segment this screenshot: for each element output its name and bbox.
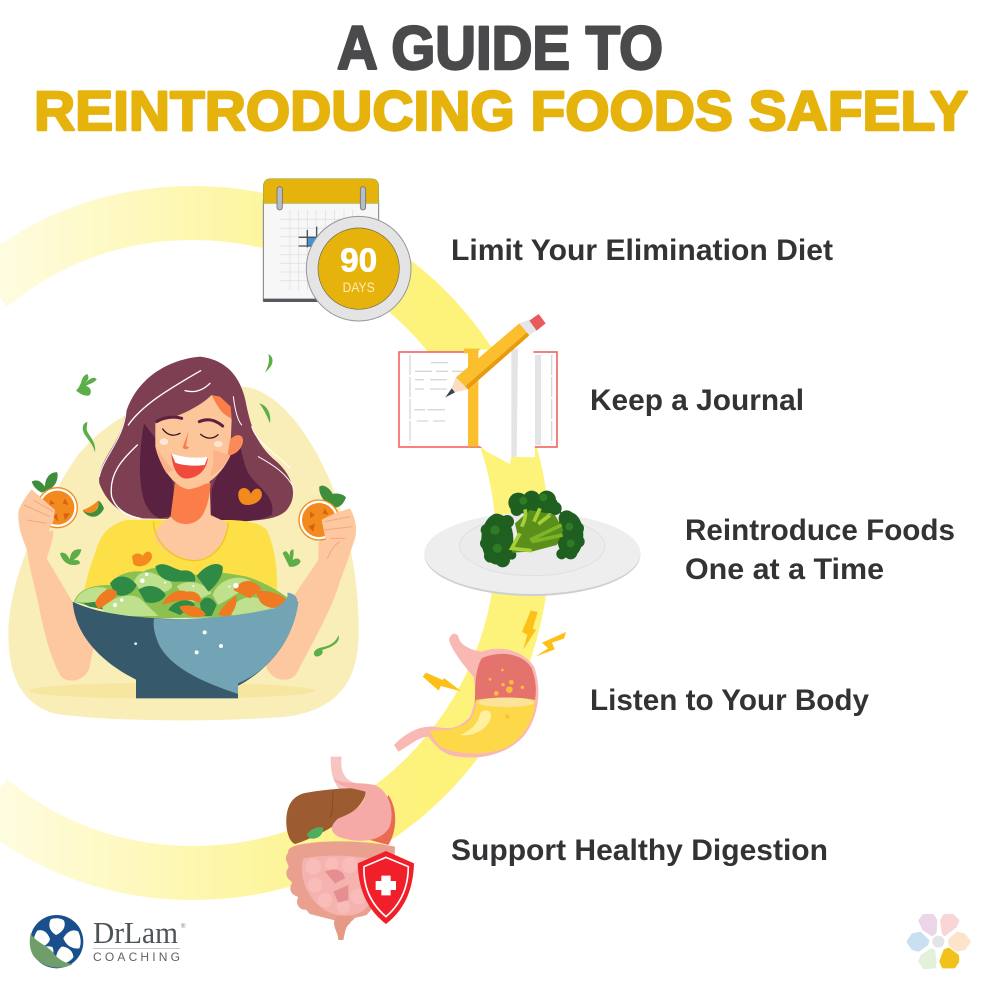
salad [74,564,293,618]
rectum [334,915,352,940]
forehead shadow [212,395,232,418]
bowl sparkles [134,630,223,654]
icon: flower mark [908,916,969,968]
bowl light side [154,602,298,694]
plate [424,513,640,596]
badge: 90 [340,242,377,279]
hair highlights [99,371,294,518]
esophagus [331,757,363,793]
label: reintroduce foods: Reintroduce Foods [685,514,955,547]
shirt [83,520,277,597]
acid highlight [460,710,491,735]
logo mark [30,915,83,968]
mouth [171,453,208,479]
stomach upper [475,654,536,702]
calendar page [263,200,379,301]
calendar header [263,179,379,203]
right orange [299,486,346,540]
calendar rings [277,187,366,210]
pencil [445,314,546,397]
neck [154,477,228,561]
bowl dark side [73,602,298,694]
hair back [99,357,293,521]
page lines [410,355,552,444]
ear [227,435,243,456]
right hand [322,508,356,567]
step labels [451,234,955,867]
large intestine [286,841,395,923]
registered mark: ® [181,923,186,930]
floor shadow [28,683,315,699]
bowl base [136,673,238,698]
ribbon spine [464,349,480,447]
icon: calendar with 90 days badge [263,179,411,321]
intestine lobes [305,857,366,913]
face [155,395,232,489]
neck shadow [171,483,211,524]
icon: journal and pencil [399,314,557,464]
broccoli [480,491,585,567]
acid surface [478,698,534,707]
illustration: woman with salad bowl [8,354,359,720]
eyes and brows [157,417,223,438]
calendar marked day [299,227,318,247]
acid [429,697,535,754]
label: keep a journal: Keep a Journal [590,384,804,417]
red stomach edge [370,795,395,845]
left arm [27,530,95,681]
icon: plate with broccoli [424,491,640,596]
background blob [8,387,359,720]
yellow path ring [0,213,523,873]
badge [306,216,411,321]
floating leaves [60,354,339,656]
small intestine [302,856,377,916]
label: limit elimination diet: Limit Your Elimination Diet [451,234,833,267]
title [34,14,968,142]
logo: DrLam Coaching [30,915,186,968]
badge: DAYS [343,280,375,295]
nose [183,432,189,449]
left orange [32,472,77,528]
liver [286,788,366,844]
lightning bolts [423,611,566,691]
right arm [263,530,354,680]
hair shadow right [211,440,272,522]
label: support healthy digestion: Support Healthy Digestion [451,834,828,867]
left hand [18,489,55,553]
stomach [332,778,392,841]
icon: digestive system with shield [286,757,414,940]
wordmark: DrLam [93,915,178,950]
label: listen to your body: Listen to Your Body [590,684,870,717]
intestine folds [325,869,348,903]
title: REINTRODUCING FOODS SAFELY [34,79,968,142]
icon: stomach [394,611,566,758]
floating orange bits [83,488,262,566]
turning pages [479,347,535,464]
divider and tagline: COACHING [93,950,180,964]
esophagus and stomach wall [394,634,538,758]
hair shadow left [140,423,175,518]
bowl rim [267,593,297,612]
cheeks [157,447,230,477]
floating slice rind [83,501,104,517]
title: A GUIDE TO [337,14,663,82]
open book [399,352,557,447]
gallbladder [307,827,323,839]
bubbles [489,669,524,719]
shield [358,851,414,924]
label: one at a time: One at a Time [685,553,884,586]
shirt neckline [153,522,228,561]
calendar grid [280,210,370,290]
